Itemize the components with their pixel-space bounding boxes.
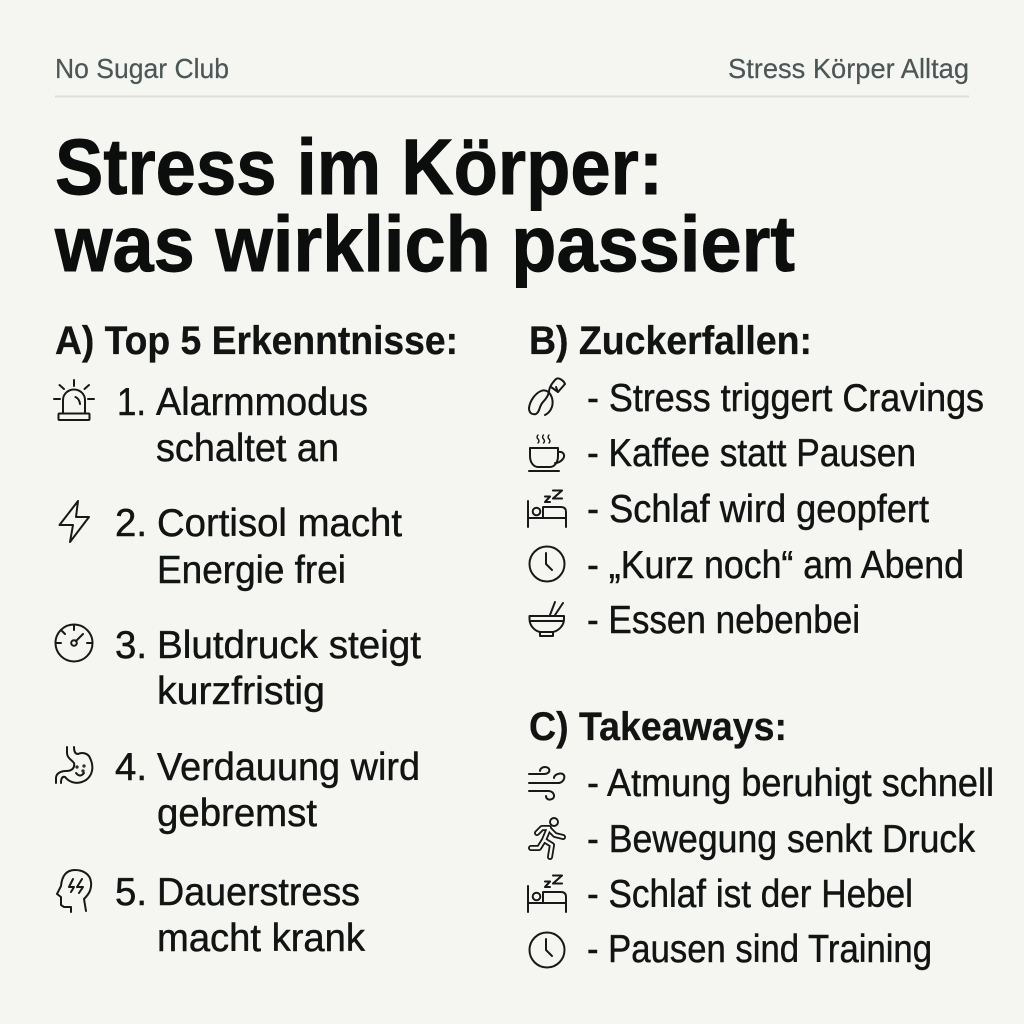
icon: coffee cup (529, 435, 564, 471)
heading A: A) Top 5 Erkenntnisse: (55, 319, 458, 363)
item 3: Blutdruck steigt (157, 624, 421, 667)
row: breathing: - Atmung beruhigt schnell (587, 762, 994, 805)
title: Stress im Körper: (55, 122, 663, 211)
item 3: 3. (115, 624, 147, 667)
heading B: B) Zuckerfallen: (529, 319, 812, 363)
icon: alarm light (54, 380, 94, 420)
item 5: 5. (115, 871, 147, 914)
icon: wind (529, 767, 564, 800)
icon: bed (528, 876, 566, 912)
icon: clock (530, 932, 564, 968)
row: sleep: - Schlaf wird geopfert (587, 488, 929, 531)
row: movement: - Bewegung senkt Druck (587, 818, 976, 861)
row: sleep lever: - Schlaf ist der Hebel (587, 873, 913, 916)
item 5: macht krank (157, 917, 366, 960)
title: was wirklich passiert (54, 199, 795, 288)
brand name: No Sugar Club (55, 53, 229, 84)
icon: stomach (56, 747, 92, 783)
icon: runner (531, 818, 563, 857)
heading C: C) Takeaways: (529, 705, 787, 749)
item 4: Verdauung wird (157, 746, 420, 789)
item 4: gebremst (157, 792, 317, 835)
item 2 (60, 501, 402, 592)
panel: B sugar traps (528, 319, 984, 642)
panel: C takeaways (528, 705, 994, 971)
item 4: 4. (115, 746, 147, 789)
item 1: schaltet an (156, 427, 339, 470)
icon: clock (530, 546, 564, 582)
icon: bed (528, 490, 566, 527)
row: cravings: - Stress triggert Cravings (587, 377, 984, 420)
item 1: Alarmmodus (156, 381, 368, 424)
item 4 (56, 746, 420, 835)
title (54, 122, 795, 288)
item 3 (56, 624, 421, 713)
icon: lightning bolt (60, 501, 89, 542)
item 2: Cortisol macht (157, 502, 402, 545)
item 1 (54, 380, 368, 470)
row: breaks: - Pausen sind Training (587, 928, 932, 971)
item 2: 2. (115, 502, 147, 545)
icon: gauge (56, 624, 92, 662)
icon: cravings (529, 378, 565, 415)
icon: bowl with chopsticks (530, 602, 564, 636)
row: coffee: - Kaffee statt Pausen (587, 432, 916, 475)
row: evening: - „Kurz noch“ am Abend (587, 544, 964, 587)
header (55, 53, 969, 96)
panel: A top 5 findings (54, 319, 458, 960)
row: eating: - Essen nebenbei (587, 599, 860, 642)
item 3: kurzfristig (157, 670, 325, 713)
item 2: Energie frei (157, 549, 346, 592)
item 1: 1. (117, 381, 146, 424)
topic tags: Stress Körper Alltag (728, 53, 969, 84)
item 5 (57, 870, 366, 960)
icon: head with stress bolts (57, 870, 91, 912)
item 5: Dauerstress (157, 871, 360, 914)
